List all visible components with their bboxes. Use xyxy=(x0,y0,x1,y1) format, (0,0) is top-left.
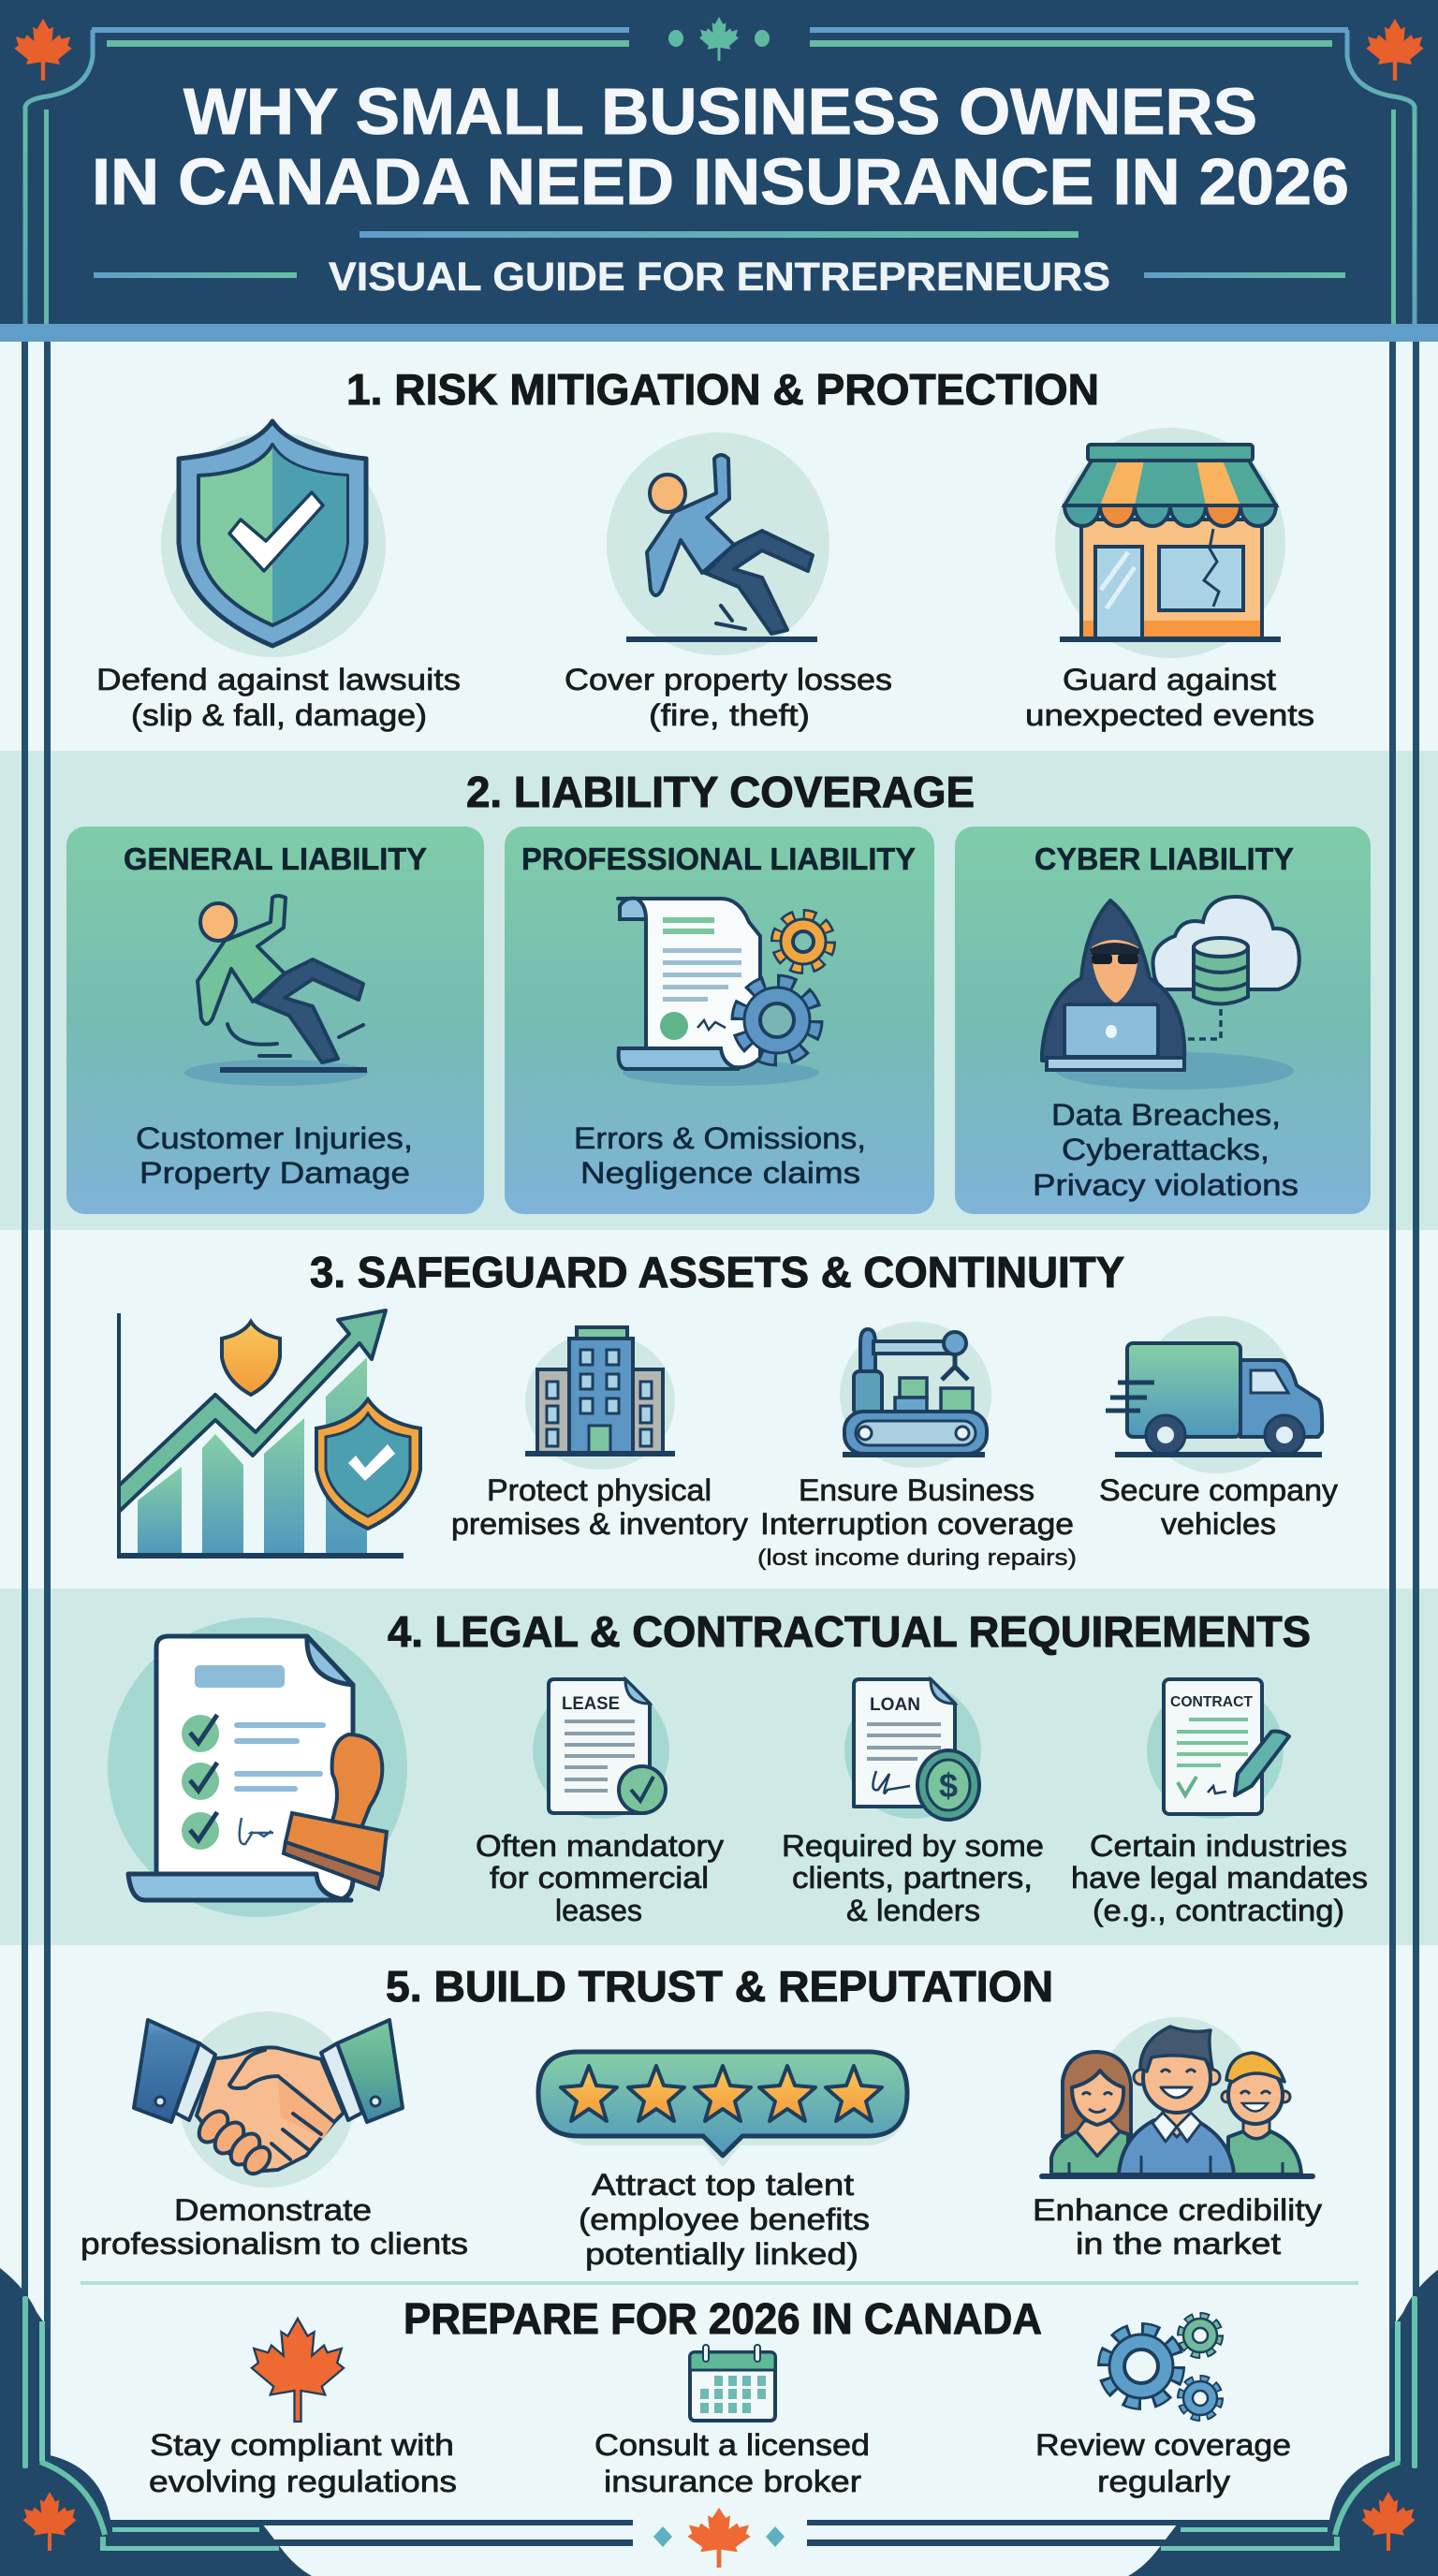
caption: broker: Consult a licensed xyxy=(594,2428,870,2462)
caption: unexpected events xyxy=(1025,663,1314,732)
icon: bottom centre maple leaf with diamonds xyxy=(653,2508,785,2568)
caption: credibility: Enhance credibility xyxy=(1033,2193,1322,2227)
icon: rubber stamp xyxy=(284,1734,387,1889)
caption: credibility xyxy=(1033,2193,1322,2261)
card caption: Cyberattacks, xyxy=(1062,1133,1269,1166)
caption: professionalism: Demonstrate xyxy=(174,2193,372,2227)
icon: top centre teal maple leaf with dots xyxy=(668,17,770,61)
bottom frame corners and lines xyxy=(0,2268,1438,2576)
title: IN CANADA NEED INSURANCE IN 2026 xyxy=(92,145,1349,218)
panel: prepare for 2026 xyxy=(22,2294,1416,2568)
card caption xyxy=(136,1121,413,1190)
icon: loan document: $ xyxy=(939,1766,958,1805)
caption: lawsuits: (slip & fall, damage) xyxy=(131,698,427,732)
icon: gold shield xyxy=(222,1322,280,1395)
icon: delivery truck xyxy=(1106,1316,1322,1473)
heading: 4. LEGAL & CONTRACTUAL REQUIREMENTS xyxy=(388,1607,1311,1656)
caption: lawsuits xyxy=(96,663,461,732)
caption: commercial leases xyxy=(476,1829,724,1927)
caption: business interruption: Interruption coverage xyxy=(760,1507,1074,1541)
panel: section 2 liability coverage xyxy=(66,768,1371,1214)
icon: storefront with broken window xyxy=(1055,428,1285,658)
person: man on the right xyxy=(1222,2053,1301,2174)
caption: professionalism xyxy=(81,2193,468,2261)
caption: clients and lenders: clients, partners, xyxy=(792,1861,1033,1895)
caption: vehicles: Secure company xyxy=(1099,1473,1338,1507)
caption: unexpected events: Guard against xyxy=(1063,663,1276,696)
icon: calendar xyxy=(690,2345,775,2421)
caption: top talent: (employee benefits xyxy=(579,2203,870,2236)
caption: lawsuits: Defend against lawsuits xyxy=(96,663,461,696)
card caption: Property Damage xyxy=(139,1156,410,1190)
caption: vehicles xyxy=(1099,1473,1338,1541)
heading: PREPARE FOR 2026 IN CANADA xyxy=(404,2294,1042,2343)
icon: lease document: LEASE xyxy=(562,1694,620,1714)
card caption: Data Breaches, xyxy=(1051,1098,1281,1132)
panel: header xyxy=(0,0,1438,342)
header frame ornaments xyxy=(25,27,1415,324)
icon: slipping person xyxy=(184,896,368,1086)
caption: regulations: evolving regulations xyxy=(149,2465,457,2498)
heading: 3. SAFEGUARD ASSETS & CONTINUITY xyxy=(310,1248,1124,1296)
caption: regulations: Stay compliant with xyxy=(150,2428,454,2462)
caption: industries: Certain industries xyxy=(1090,1829,1347,1863)
caption: business interruption: Ensure Business xyxy=(799,1473,1034,1507)
icon: checklist document and stamp xyxy=(108,1617,407,1917)
card caption: Errors & Omissions, xyxy=(574,1121,866,1155)
card caption xyxy=(574,1121,866,1190)
icon: maple leaf xyxy=(252,2319,344,2422)
caption: review coverage xyxy=(1035,2428,1291,2498)
caption: top talent xyxy=(579,2168,870,2271)
icon: contract document with pen: CONTRACT xyxy=(1170,1694,1253,1710)
caption: business interruption: (lost income during repairs) xyxy=(757,1545,1077,1571)
caption: property xyxy=(565,663,892,732)
icon: bottom left maple leaf xyxy=(22,2492,77,2551)
icon: orange gear xyxy=(778,916,829,967)
caption: premises: Protect physical xyxy=(487,1473,712,1507)
card caption xyxy=(1033,1098,1299,1202)
caption: top talent: potentially linked) xyxy=(585,2237,858,2271)
caption: premises: premises & inventory xyxy=(451,1507,748,1541)
band: section 2 background xyxy=(0,751,1438,1230)
subtitle xyxy=(94,255,1345,300)
icon: five star rating bubble xyxy=(538,2052,908,2167)
icon: person slipping xyxy=(607,432,829,655)
heading: 5. BUILD TRUST & REPUTATION xyxy=(386,1962,1053,2011)
panel: section 4 legal requirements xyxy=(108,1607,1368,1927)
caption: clients and lenders: & lenders xyxy=(846,1894,980,1927)
icon: hacker with laptop and cloud database xyxy=(1042,897,1299,1090)
chart: growth bars with arrow and shields xyxy=(117,1310,420,1559)
icon: top left maple leaf xyxy=(14,19,72,80)
heading: 2. LIABILITY COVERAGE xyxy=(466,768,975,816)
panel: section 3 safeguard assets xyxy=(117,1248,1338,1571)
caption: unexpected events: unexpected events xyxy=(1025,698,1314,732)
caption: regulations xyxy=(149,2428,457,2498)
person: man in the centre xyxy=(1069,2027,1283,2174)
card: general liability xyxy=(66,827,484,1214)
band: section 4 background xyxy=(0,1588,1438,1945)
card: cyber liability xyxy=(955,827,1371,1214)
caption: broker: insurance broker xyxy=(604,2465,861,2498)
caption: premises xyxy=(451,1473,748,1541)
caption: property: Cover property losses xyxy=(565,663,892,696)
caption: clients and lenders: Required by some xyxy=(782,1829,1044,1863)
caption: professionalism: professionalism to clients xyxy=(81,2227,468,2261)
caption: commercial leases: leases xyxy=(555,1894,642,1927)
panel: section 5 trust and reputation xyxy=(81,1962,1322,2271)
card caption: Customer Injuries, xyxy=(136,1121,413,1155)
caption: industries: (e.g., contracting) xyxy=(1093,1894,1344,1927)
icon: blue gear xyxy=(741,984,814,1057)
caption: clients and lenders xyxy=(782,1829,1044,1927)
caption: property: (fire, theft) xyxy=(649,698,810,732)
caption: industries xyxy=(1071,1829,1368,1927)
caption: business interruption xyxy=(757,1473,1077,1571)
icon: bottom right maple leaf xyxy=(1361,2492,1416,2551)
caption: broker xyxy=(594,2428,870,2498)
icon: loan document xyxy=(844,1679,981,1820)
caption: commercial leases: for commercial xyxy=(490,1861,709,1895)
caption: credibility: in the market xyxy=(1076,2227,1281,2261)
icon: robotic arm and conveyor xyxy=(840,1322,991,1468)
icon: handshake xyxy=(134,2012,403,2188)
subtitle: VISUAL GUIDE FOR ENTREPRENEURS xyxy=(329,255,1110,300)
icon: building xyxy=(525,1327,675,1470)
caption: commercial leases: Often mandatory xyxy=(476,1829,724,1863)
title: WHY SMALL BUSINESS OWNERS xyxy=(183,75,1257,148)
card caption: Negligence claims xyxy=(580,1156,860,1190)
card title: PROFESSIONAL LIABILITY xyxy=(521,842,916,876)
icon: top right maple leaf xyxy=(1366,19,1424,80)
card: professional liability xyxy=(505,827,934,1214)
icon: gears xyxy=(1106,2317,1219,2417)
icon: shield with check xyxy=(161,421,386,657)
card title: CYBER LIABILITY xyxy=(1034,842,1294,876)
caption: vehicles: vehicles xyxy=(1161,1507,1276,1541)
person: woman xyxy=(1051,2052,1131,2174)
caption: review coverage: regularly xyxy=(1097,2465,1230,2498)
icon: shield with check xyxy=(316,1399,420,1529)
card title: GENERAL LIABILITY xyxy=(124,842,427,876)
card caption: Privacy violations xyxy=(1033,1168,1299,1202)
panel: section 1 risk mitigation xyxy=(96,365,1314,732)
caption: top talent: Attract top talent xyxy=(592,2168,854,2202)
caption: review coverage: Review coverage xyxy=(1035,2428,1291,2462)
title xyxy=(92,75,1349,218)
heading: 1. RISK MITIGATION & PROTECTION xyxy=(346,365,1099,414)
caption: industries: have legal mandates xyxy=(1071,1861,1368,1895)
icon: loan document: LOAN xyxy=(870,1695,920,1715)
icon: contract document with pen xyxy=(1147,1679,1289,1819)
icon: lease document xyxy=(533,1679,669,1819)
icon: document with gears xyxy=(618,899,829,1086)
icon: three smiling people xyxy=(1039,2017,1315,2179)
